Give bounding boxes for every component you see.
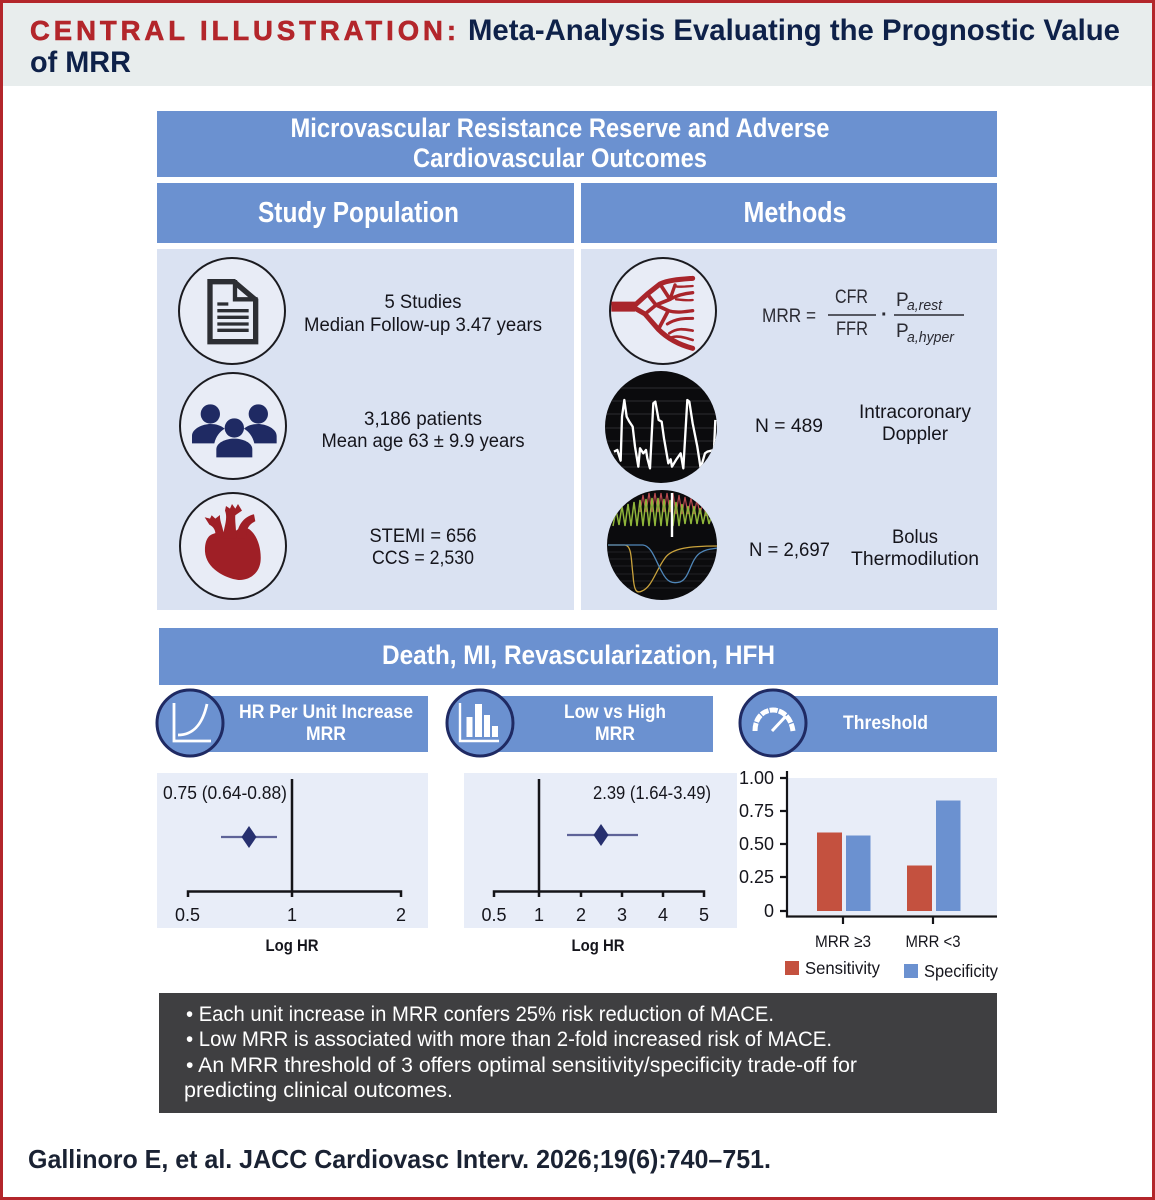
panel: study population [157, 249, 574, 610]
formula: MRR = [762, 306, 816, 327]
bar chart: threshold: MRR ≥3 [815, 932, 871, 951]
formula: a,rest [907, 297, 943, 314]
heading: methods [581, 183, 997, 243]
text: thermodilution: Thermodilution [851, 549, 979, 570]
forest plot: low vs high: 4 [658, 905, 668, 925]
takeaways box: • An MRR threshold of 3 offers optimal sensitivity/specificity trade-off for [186, 1054, 857, 1077]
forest plot: low vs high: 5 [699, 905, 709, 925]
heading: outcomes: Death, MI, Revascularization, HFH [382, 640, 775, 670]
icon: doppler waveform [600, 371, 720, 483]
heading: methods: Methods [744, 197, 846, 229]
text: patients [322, 409, 524, 452]
forest plot: HR per unit increase: Log HR [266, 936, 318, 955]
icon: people [180, 373, 286, 479]
forest plot: low vs high: 0.5 [481, 905, 507, 925]
forest plot: HR per unit increase: 1 [287, 905, 297, 925]
heading: study population: Study Population [258, 197, 459, 229]
title: CENTRAL ILLUSTRATION: [30, 15, 456, 46]
subheading: HR per unit increase: MRR [306, 724, 346, 745]
forest plot: low vs high: 3 [617, 905, 627, 925]
icon: microvasculature [610, 258, 716, 364]
legend: Specificity [924, 961, 998, 981]
bar chart: threshold: 0.75 [739, 801, 774, 821]
takeaways box: • Each unit increase in MRR confers 25% risk reduction of MACE. [186, 1003, 774, 1026]
takeaways box [159, 993, 997, 1113]
icon: curve chart [174, 703, 211, 741]
formula: · [881, 304, 888, 326]
takeaways box: predicting clinical outcomes. [184, 1079, 453, 1102]
subheading: HR per unit increase [157, 690, 428, 756]
formula [762, 287, 964, 346]
bar chart: threshold: MRR <3 [906, 932, 960, 951]
text: thermodilution [749, 527, 979, 570]
subheading: low vs high [447, 690, 713, 756]
forest plot: HR per unit increase [157, 773, 428, 955]
formula: a,hyper [907, 329, 955, 346]
forest plot: low vs high: 1 [534, 905, 544, 925]
icon: thermodilution curves [607, 490, 717, 600]
takeaways box: • Low MRR is associated with more than 2-fold increased risk of MACE. [186, 1028, 832, 1051]
text: patients: 3,186 patients [364, 409, 482, 430]
header band [3, 3, 1152, 86]
icon: bar chart [460, 703, 499, 741]
title [30, 14, 1120, 79]
bar chart: threshold: 0.25 [739, 867, 774, 887]
panel: methods [581, 249, 997, 610]
text: stemi ccs: CCS = 2,530 [372, 548, 474, 569]
formula: P [896, 290, 909, 311]
main heading: Microvascular Resistance Reserve and Adverse [290, 113, 830, 143]
heading: study population [157, 183, 574, 243]
subheading: HR per unit increase: HR Per Unit Increase [239, 702, 413, 723]
text: doppler: Intracoronary [859, 402, 971, 423]
forest plot: HR per unit increase: 0.75 (0.64-0.88) [163, 783, 287, 803]
forest plot: low vs high [464, 773, 737, 955]
subheading: threshold: Threshold [843, 713, 928, 734]
main heading [157, 111, 997, 177]
forest plot: HR per unit increase: 0.5 [175, 905, 200, 925]
icon: gauge [755, 710, 793, 731]
bars: MRR >=3 and MRR <3 [817, 800, 960, 911]
bar chart: threshold [739, 768, 998, 981]
text: patients: Mean age 63 ± 9.9 years [322, 431, 524, 452]
text: doppler: Doppler [882, 424, 949, 445]
heading: outcomes [159, 628, 998, 685]
title: Meta-Analysis Evaluating the Prognostic Value [468, 14, 1120, 47]
legend [785, 958, 998, 981]
text: stemi ccs: STEMI = 656 [370, 526, 476, 547]
main heading: Cardiovascular Outcomes [413, 143, 707, 173]
text: studies: 5 Studies [384, 292, 462, 313]
legend: Sensitivity [805, 958, 880, 978]
formula: P [896, 321, 909, 342]
icon: document [179, 258, 285, 364]
text: studies: Median Follow-up 3.47 years [304, 315, 542, 336]
forest plot: low vs high: Log HR [572, 936, 624, 955]
text: studies [304, 292, 542, 336]
text: thermodilution: Bolus [892, 527, 938, 548]
bar chart: threshold: 0.50 [739, 834, 774, 854]
bar chart: threshold: 0 [764, 901, 774, 921]
text: thermodilution: N = 2,697 [749, 540, 830, 561]
bar chart: threshold: 1.00 [739, 768, 774, 788]
forest plot: low vs high: 2 [576, 905, 586, 925]
text: stemi ccs [370, 526, 476, 569]
forest plot: low vs high: 2.39 (1.64-3.49) [593, 783, 711, 803]
subheading: low vs high: MRR [595, 724, 635, 745]
citation: Gallinoro E, et al. JACC Cardiovasc Interv. 2026;19(6):740–751. [28, 1144, 771, 1174]
formula: CFR [835, 287, 868, 308]
title: of MRR [30, 46, 131, 79]
subheading: low vs high: Low vs High [564, 702, 666, 723]
subheading: threshold [740, 690, 997, 756]
formula: FFR [836, 319, 868, 340]
text: doppler: N = 489 [755, 416, 823, 437]
icon: heart [180, 493, 286, 599]
forest plot: HR per unit increase: 2 [396, 905, 406, 925]
text: doppler [755, 402, 971, 445]
